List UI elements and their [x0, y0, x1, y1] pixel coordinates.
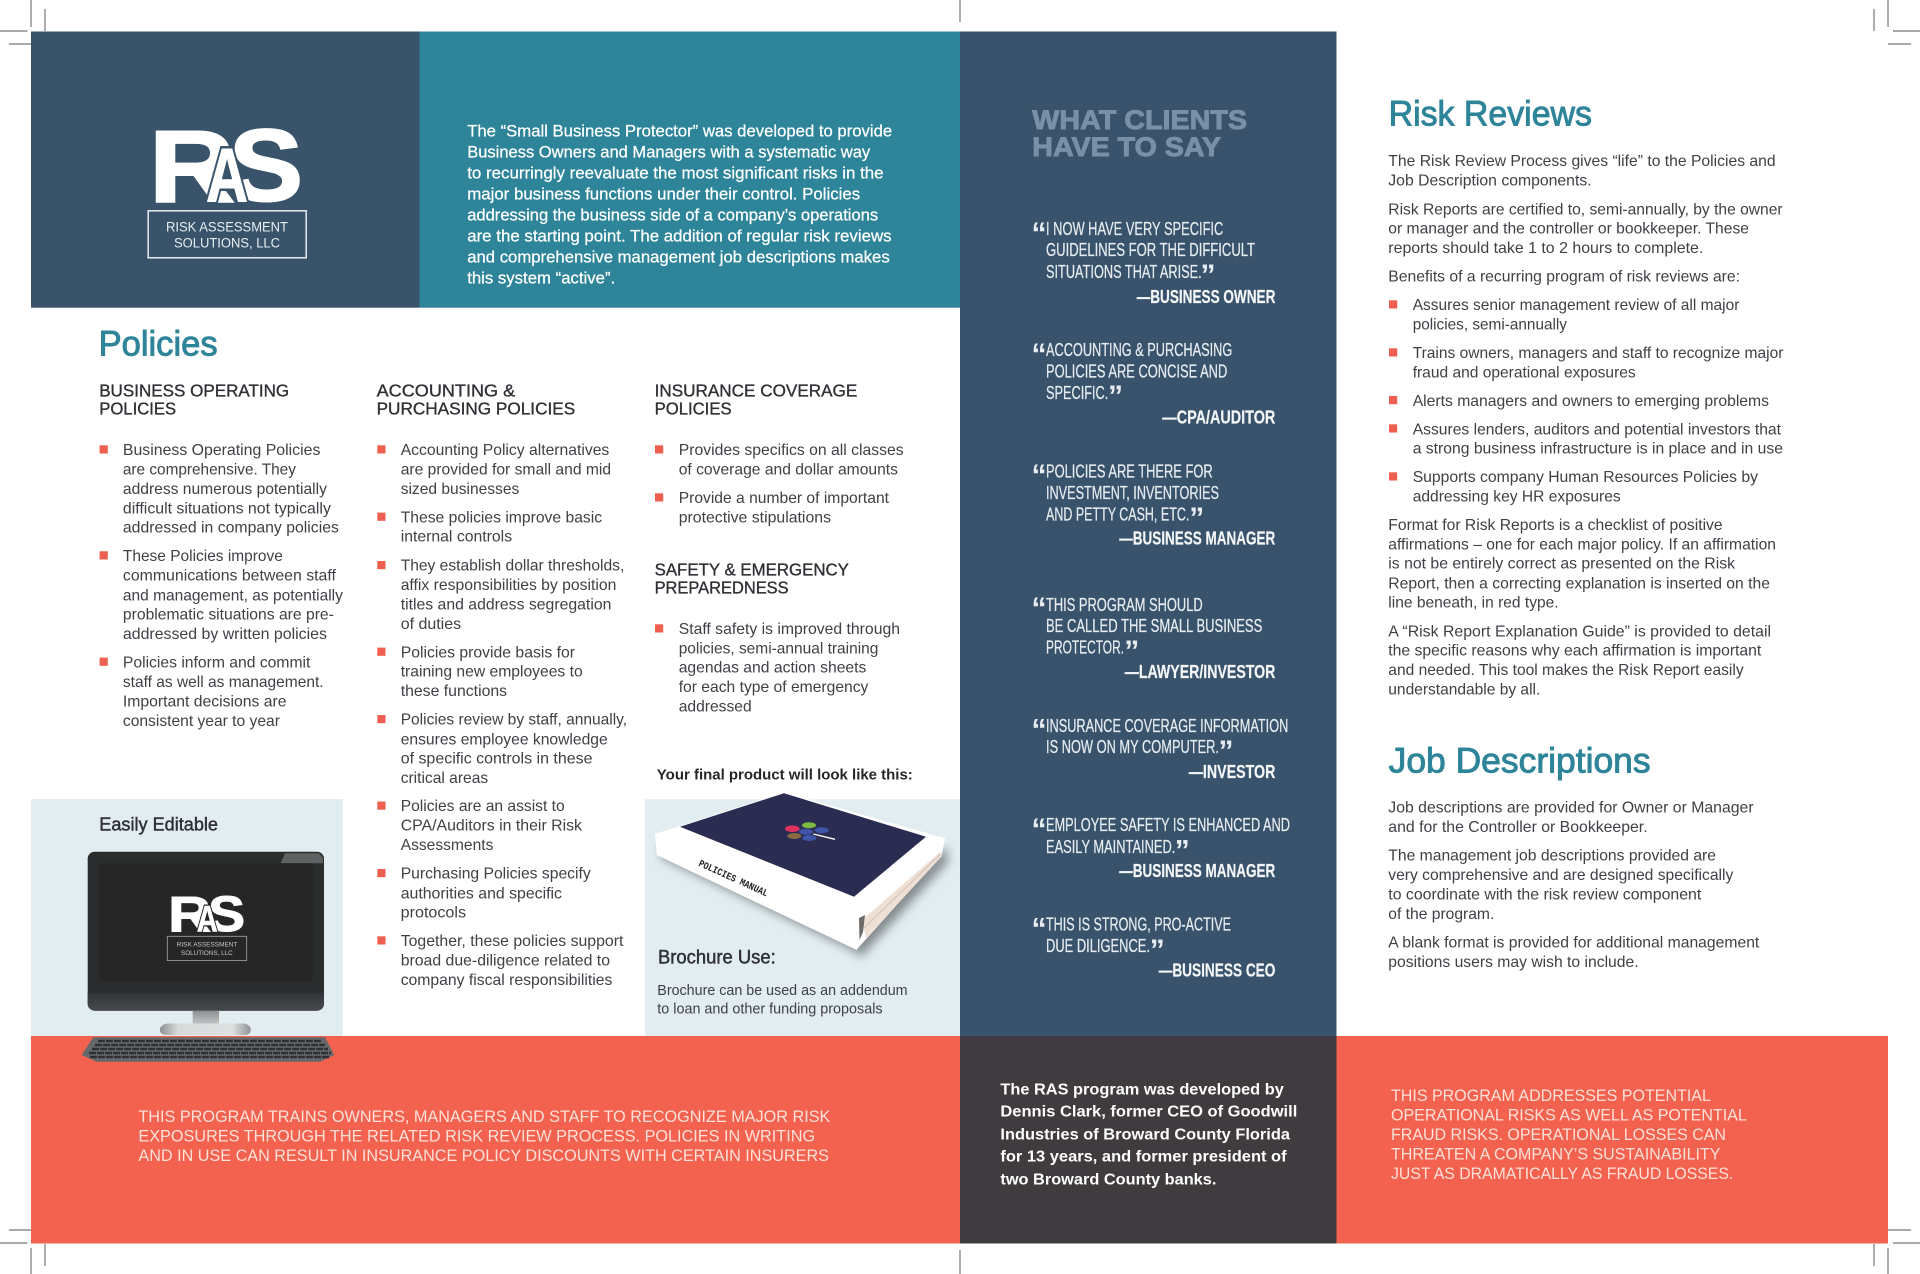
- logo: company name box: RISK ASSESSMENT: [166, 220, 288, 235]
- text: operational risks callout: JUST AS DRAMATICALLY AS FRAUD LOSSES.: [1391, 1165, 1733, 1183]
- bullet: alternatives: [377, 442, 611, 498]
- bullet: annual review: [377, 712, 627, 787]
- text: policies manual spine: POLICIES MANUAL: [696, 859, 769, 900]
- quote: business manager safety: EMPLOYEE SAFETY IS ENHANCED AND: [1046, 814, 1290, 835]
- bullet: communications: These Policies improve: [123, 548, 283, 565]
- bullet: purchasing: Purchasing Policies specify: [401, 866, 591, 883]
- bullet: due diligence: [377, 933, 624, 989]
- text: introduction paragraph: are the starting point. The addition of regular risk reviews: [467, 226, 892, 245]
- text: operational risks callout: OPERATIONAL RISKS AS WELL AS POTENTIAL: [1391, 1106, 1747, 1124]
- text: management job descriptions: [1388, 848, 1733, 923]
- bullet: comprehensive: addressed in company policies: [123, 520, 339, 537]
- bullet: dollar thresholds: titles and address segregation: [401, 596, 611, 613]
- icon: policies manual binder: [655, 792, 948, 958]
- quote: investor: INSURANCE COVERAGE INFORMATION: [1046, 715, 1288, 736]
- bullet: coverage specifics: of coverage and dollar amounts: [679, 461, 898, 478]
- bullet: trains owners: Trains owners, managers and staff to recognize major: [1413, 345, 1784, 362]
- text: job descriptions intro: and for the Controller or Bookkeeper.: [1388, 819, 1648, 836]
- text: developer biography: two Broward County banks.: [1000, 1171, 1216, 1188]
- panel: bottom left callout: [31, 1036, 960, 1244]
- quote: business CEO: ”: [1150, 934, 1165, 967]
- text: developer biography: [1000, 1081, 1297, 1188]
- bullet: inform and commit: [100, 654, 324, 730]
- text: risk reports: Risk Reports are certified to, semi-annually, by the owner: [1388, 201, 1783, 218]
- quote: CPA auditor: [1032, 338, 1275, 428]
- heading: safety and emergency preparedness: SAFETY & EMERGENCY: [655, 559, 849, 579]
- bullet: inform and commit: consistent year to year: [123, 713, 281, 730]
- text: risk review intro: [1388, 153, 1776, 190]
- text: explanation guide: understandable by all.: [1388, 681, 1540, 698]
- bullet: alerts: Alerts managers and owners to emerging problems: [1413, 393, 1769, 410]
- bullet: auditors: [377, 798, 583, 854]
- text: developer biography: Dennis Clark, former CEO of Goodwill: [1000, 1104, 1297, 1121]
- text: management job descriptions: very comprehensive and are designed specifically: [1388, 867, 1733, 884]
- logo: company name on screen: [167, 936, 247, 960]
- logo: company name on screen: RISK ASSESSMENT: [177, 942, 237, 949]
- bullet: communications: problematic situations are pre-: [123, 607, 334, 624]
- text: operational risks callout: [1391, 1087, 1747, 1183]
- quote: lawyer investor: ”: [1124, 635, 1139, 668]
- quote: investor: “: [1032, 714, 1046, 746]
- icon: keyboard: [82, 1037, 334, 1062]
- text: blank format: [1388, 934, 1760, 971]
- bullet: staff safety: agendas and action sheets: [679, 660, 866, 677]
- bullet: internal controls: [377, 509, 602, 546]
- quote: lawyer investor: THIS PROGRAM SHOULD: [1046, 594, 1203, 615]
- logo: RAS: A: [206, 134, 248, 218]
- bullet: comprehensive: are comprehensive. They: [123, 461, 296, 478]
- logo: RAS: R: [149, 110, 235, 224]
- text: introduction paragraph: and comprehensive management job descriptions makes: [467, 247, 890, 266]
- quote: business manager: [1032, 459, 1275, 548]
- bullet: stipulations: [655, 490, 890, 526]
- icon: monitor: [88, 852, 324, 1011]
- bullet: dollar thresholds: of duties: [401, 616, 461, 633]
- text: introduction paragraph: Business Owners and Managers with a systematic way: [467, 143, 871, 162]
- quote: CPA auditor: ACCOUNTING & PURCHASING: [1046, 339, 1232, 360]
- heading: accounting and purchasing policies: ACCOUNTING &: [377, 381, 516, 401]
- bullet: inform and commit: Policies inform and commit: [123, 654, 311, 671]
- quote: CPA auditor: “: [1032, 338, 1046, 371]
- text: training callout: EXPOSURES THROUGH THE RELATED RISK REVIEW PROCESS. POLICIES IN WRITING: [138, 1128, 815, 1146]
- quote: business manager: POLICIES ARE THERE FOR: [1046, 460, 1213, 482]
- bullet: due diligence: Together, these policies support: [401, 933, 624, 950]
- text: report format: line beneath, in red type.: [1388, 595, 1559, 612]
- text: report format: [1388, 517, 1776, 612]
- quote: business manager: —BUSINESS MANAGER: [1119, 528, 1275, 548]
- text: risk review intro: Job Description components.: [1388, 173, 1592, 190]
- text: management job descriptions: to coordinate with the risk review component: [1388, 887, 1702, 904]
- quote: investor: IS NOW ON MY COMPUTER.: [1046, 736, 1219, 757]
- text: blank format: positions users may wish to include.: [1388, 954, 1639, 971]
- text: blank format: A blank format is provided for additional management: [1388, 934, 1760, 951]
- heading: what clients have to say: WHAT CLIENTS: [1032, 105, 1247, 135]
- quote: lawyer investor: —LAWYER/INVESTOR: [1125, 661, 1275, 682]
- quote: business manager: AND PETTY CASH, ETC.: [1046, 503, 1189, 524]
- panel: easily editable: [31, 799, 343, 1036]
- logo: RAS: [149, 108, 303, 224]
- quote: business owner: “: [1032, 217, 1046, 250]
- bullet: annual review: ensures employee knowledge: [401, 731, 608, 748]
- bullet: stipulations: Provide a number of important: [679, 490, 890, 507]
- bullet: due diligence: company fiscal responsibilities: [401, 972, 612, 989]
- heading: brochure use: Brochure Use:: [658, 948, 776, 969]
- heading: risk reviews: Risk Reviews: [1389, 95, 1592, 134]
- text: risk reports: or manager and the controller or bookkeeper. These: [1388, 221, 1749, 238]
- bullet: communications: addressed by written policies: [123, 626, 327, 643]
- bullet: coverage specifics: [655, 442, 904, 478]
- panel: bottom right callout: [1336, 1036, 1888, 1244]
- text: report format: affirmations – one for each major policy. If an affirmation: [1388, 536, 1776, 553]
- text: report format: Format for Risk Reports is a checklist of positive: [1388, 517, 1723, 534]
- heading: insurance coverage policies: [655, 381, 857, 418]
- quote: business manager safety: EASILY MAINTAINED.: [1046, 836, 1175, 857]
- quote: investor: —INVESTOR: [1189, 761, 1275, 782]
- text: developer biography: Industries of Broward County Florida: [1000, 1126, 1290, 1143]
- bullet: communications: and management, as potentially: [123, 587, 343, 604]
- bullet: auditors: Policies are an assist to: [401, 798, 565, 815]
- heading: business operating policies: BUSINESS OPERATING: [99, 381, 289, 401]
- bullet: staff safety: Staff safety is improved through: [679, 621, 900, 638]
- bullet: human resources: [1389, 469, 1758, 506]
- bullet: alternatives: sized businesses: [401, 481, 519, 498]
- quote: business CEO: DUE DILIGENCE.: [1046, 935, 1150, 956]
- bullet: human resources: addressing key HR exposures: [1413, 489, 1621, 506]
- bullet: purchasing: [377, 866, 591, 922]
- bullet: training: training new employees to: [401, 664, 583, 681]
- logo: company name box: [148, 211, 306, 258]
- bullet: alternatives: Accounting Policy alternatives: [401, 442, 609, 459]
- bullet: staff safety: policies, semi-annual training: [679, 641, 878, 658]
- bullet: internal controls: internal controls: [401, 529, 512, 546]
- icon: desktop computer: [82, 852, 334, 1062]
- bullet: assures lenders: [1389, 421, 1783, 458]
- quote: business manager safety: [1032, 813, 1290, 881]
- bullet: senior management review: [1389, 297, 1740, 334]
- text: benefits intro: Benefits of a recurring program of risk reviews are:: [1388, 268, 1740, 285]
- quote: investor: [1032, 714, 1288, 782]
- panel: brochure use: [645, 799, 960, 1036]
- text: explanation guide: A “Risk Report Explanation Guide” is provided to detail: [1388, 623, 1771, 640]
- quote: investor: ”: [1218, 735, 1234, 768]
- quote: business manager safety: “: [1032, 813, 1046, 846]
- text: brochure description: [657, 983, 908, 1017]
- quote: business CEO: —BUSINESS CEO: [1159, 960, 1275, 981]
- text: explanation guide: and needed. This tool makes the Risk Report easily: [1388, 662, 1744, 679]
- bullet: purchasing: protocols: [401, 905, 466, 922]
- bullet: internal controls: These policies improve basic: [401, 509, 602, 526]
- column: accounting and purchasing policies: [377, 381, 627, 989]
- bullet: purchasing: authorities and specific: [401, 885, 562, 902]
- text: explanation guide: the specific reasons why each affirmation is important: [1388, 643, 1762, 660]
- text: introduction paragraph: The “Small Business Protector” was developed to provide: [467, 122, 892, 141]
- text: operational risks callout: THREATEN A COMPANY’S SUSTAINABILITY: [1391, 1146, 1721, 1164]
- logo: RAS on screen: S: [208, 885, 245, 942]
- quote: business manager: INVESTMENT, INVENTORIES: [1046, 482, 1219, 503]
- heading: accounting and purchasing policies: [377, 381, 575, 418]
- quote: business CEO: [1032, 912, 1275, 981]
- quote: CPA auditor: POLICIES ARE CONCISE AND: [1046, 360, 1227, 382]
- quote: lawyer investor: [1032, 592, 1275, 682]
- bullet: communications: [100, 548, 343, 643]
- bullet: trains owners: fraud and operational exposures: [1413, 364, 1636, 381]
- bullet: dollar thresholds: affix responsibilities by position: [401, 577, 616, 594]
- column: insurance and safety policies: [655, 381, 904, 715]
- text: risk reports: [1388, 201, 1783, 257]
- heading: business operating policies: [99, 381, 289, 418]
- bullet: staff safety: addressed: [679, 698, 752, 715]
- logo: RAS: A: [206, 134, 248, 218]
- logo: RAS on screen: [168, 885, 245, 942]
- bullet: inform and commit: Important decisions are: [123, 694, 287, 711]
- quote: business manager: “: [1032, 459, 1046, 492]
- text: management job descriptions: of the program.: [1388, 906, 1494, 923]
- panel: program developer: [960, 1036, 1336, 1244]
- text: risk reports: reports should take 1 to 2 hours to complete.: [1388, 240, 1703, 257]
- logo: RAS on screen: A: [197, 898, 218, 939]
- quote: business manager: ”: [1189, 502, 1204, 535]
- bullet: auditors: Assessments: [401, 837, 493, 854]
- bullet: stipulations: protective stipulations: [679, 509, 831, 526]
- text: training callout: [138, 1108, 831, 1165]
- quote: business CEO: THIS IS STRONG, PRO-ACTIVE: [1046, 914, 1231, 935]
- text: developer biography: The RAS program was developed by: [1000, 1081, 1284, 1098]
- logo: RAS on screen: A: [197, 898, 218, 939]
- column: business operating policies: [99, 381, 343, 730]
- bullet: dollar thresholds: They establish dollar thresholds,: [401, 558, 624, 575]
- text: brochure description: Brochure can be used as an addendum: [657, 983, 908, 999]
- quote: business owner: GUIDELINES FOR THE DIFFICULT: [1046, 239, 1255, 260]
- bullet: auditors: CPA/Auditors in their Risk: [401, 817, 583, 834]
- bullet: comprehensive: address numerous potentially: [123, 481, 327, 498]
- text: report format: Report, then a correcting explanation is inserted on the: [1388, 575, 1770, 592]
- text: management job descriptions: The management job descriptions provided are: [1388, 848, 1716, 865]
- quote: CPA auditor: —CPA/AUDITOR: [1162, 406, 1275, 428]
- bullet: senior management review: policies, semi-annually: [1413, 317, 1567, 334]
- heading: safety and emergency preparedness: [655, 559, 849, 597]
- text: report format: is not be entirely correct as presented on the Risk: [1388, 556, 1736, 573]
- quote: business owner: ”: [1200, 259, 1216, 292]
- heading: business operating policies: POLICIES: [99, 398, 176, 418]
- text: introduction paragraph: to recurringly reevaluate the most significant risks in the: [467, 164, 884, 183]
- text: training callout: THIS PROGRAM TRAINS OWNERS, MANAGERS AND STAFF TO RECOGNIZE MAJOR RISK: [138, 1108, 831, 1126]
- heading: insurance coverage policies: INSURANCE COVERAGE: [655, 381, 857, 401]
- bullet: comprehensive: difficult situations not typically: [123, 500, 331, 517]
- text: risk review intro: The Risk Review Process gives “life” to the Policies and: [1388, 153, 1776, 170]
- bullet: training: these functions: [401, 683, 507, 700]
- bullet: assures lenders: a strong business infrastructure is in place and in use: [1413, 441, 1783, 458]
- text: explanation guide: [1388, 623, 1771, 698]
- logo: RAS: S: [229, 108, 303, 222]
- panel: testimonials: [960, 32, 1336, 1036]
- heading: what clients have to say: [1032, 105, 1247, 162]
- heading: what clients have to say: HAVE TO SAY: [1032, 132, 1221, 162]
- bullet: coverage specifics: Provides specifics on all classes: [679, 442, 904, 459]
- bullet: trains owners: [1389, 345, 1784, 381]
- bullet: due diligence: broad due-diligence related to: [401, 953, 610, 970]
- text: job descriptions intro: Job descriptions are provided for Owner or Manager: [1388, 800, 1754, 817]
- quote: business owner: SITUATIONS THAT ARISE.: [1046, 261, 1202, 282]
- bullet: staff safety: [655, 621, 900, 715]
- quote: CPA auditor: SPECIFIC.: [1046, 382, 1108, 403]
- icon: monitor stand: [160, 1011, 251, 1035]
- logo: company name on screen: SOLUTIONS, LLC: [181, 950, 233, 957]
- quote: lawyer investor: PROTECTOR.: [1046, 636, 1124, 657]
- text: introduction paragraph: this system “active”.: [467, 268, 615, 287]
- text: job descriptions intro: [1388, 800, 1754, 836]
- bullet: alternatives: are provided for small and mid: [401, 461, 611, 478]
- heading: accounting and purchasing policies: PURCHASING POLICIES: [377, 398, 575, 418]
- bullet: human resources: Supports company Human Resources Policies by: [1413, 469, 1758, 486]
- panel: logo header: [31, 32, 420, 308]
- text: introduction paragraph: addressing the business side of a company’s operations: [467, 205, 878, 224]
- bullet: annual review: Policies review by staff, annually,: [401, 712, 627, 729]
- text: operational risks callout: THIS PROGRAM ADDRESSES POTENTIAL: [1391, 1087, 1711, 1105]
- bullet: comprehensive: [100, 442, 339, 537]
- text: training callout: AND IN USE CAN RESULT IN INSURANCE POLICY DISCOUNTS WITH CERTAIN INSURERS: [138, 1147, 829, 1165]
- quote: business owner: I NOW HAVE VERY SPECIFIC: [1046, 218, 1223, 239]
- text: introduction paragraph: major business functions under their control. Policies: [467, 185, 860, 204]
- heading: easily editable: Easily Editable: [99, 814, 218, 835]
- bullet: inform and commit: staff as well as management.: [123, 674, 324, 691]
- bullet: training: Policies provide basis for: [401, 644, 576, 661]
- quote: business manager safety: —BUSINESS MANAGER: [1119, 860, 1275, 881]
- heading: safety and emergency preparedness: PREPAREDNESS: [655, 577, 789, 597]
- column: job descriptions: [1388, 741, 1760, 971]
- quote: lawyer investor: “: [1032, 592, 1046, 625]
- bullet: assures lenders: Assures lenders, auditors and potential investors that: [1413, 421, 1782, 438]
- logo: RAS on screen: R: [168, 886, 211, 942]
- quote: business owner: —BUSINESS OWNER: [1137, 286, 1275, 307]
- bullet: annual review: critical areas: [401, 770, 488, 787]
- bullet: staff safety: for each type of emergency: [679, 679, 868, 696]
- panel: introduction: [420, 32, 960, 308]
- quote: lawyer investor: BE CALLED THE SMALL BUSINESS: [1046, 615, 1262, 636]
- heading: insurance coverage policies: POLICIES: [655, 398, 732, 418]
- label: final product: Your final product will look like this:: [657, 767, 913, 783]
- quote: business manager safety: ”: [1175, 834, 1190, 868]
- text: brochure description: to loan and other funding proposals: [657, 1001, 883, 1017]
- bullet: senior management review: Assures senior management review of all major: [1413, 297, 1740, 314]
- heading: Policies: Policies: [99, 325, 218, 364]
- bullet: comprehensive: Business Operating Policies: [123, 442, 320, 459]
- quote: business CEO: “: [1032, 912, 1046, 946]
- bullet: training: [377, 644, 583, 700]
- heading: job descriptions: Job Descriptions: [1389, 741, 1651, 780]
- quote: CPA auditor: ”: [1108, 380, 1123, 413]
- bullet: annual review: of specific controls in these: [401, 751, 593, 768]
- text: introduction paragraph: [467, 122, 892, 287]
- column: risk reviews: [1388, 95, 1784, 698]
- bullet: dollar thresholds: [377, 558, 624, 633]
- text: operational risks callout: FRAUD RISKS. OPERATIONAL LOSSES CAN: [1391, 1126, 1726, 1144]
- logo: company name box: SOLUTIONS, LLC: [174, 235, 280, 250]
- quote: business owner: [1032, 217, 1275, 307]
- bullet: communications: communications between staff: [123, 568, 336, 585]
- text: developer biography: for 13 years, and former president of: [1000, 1149, 1287, 1166]
